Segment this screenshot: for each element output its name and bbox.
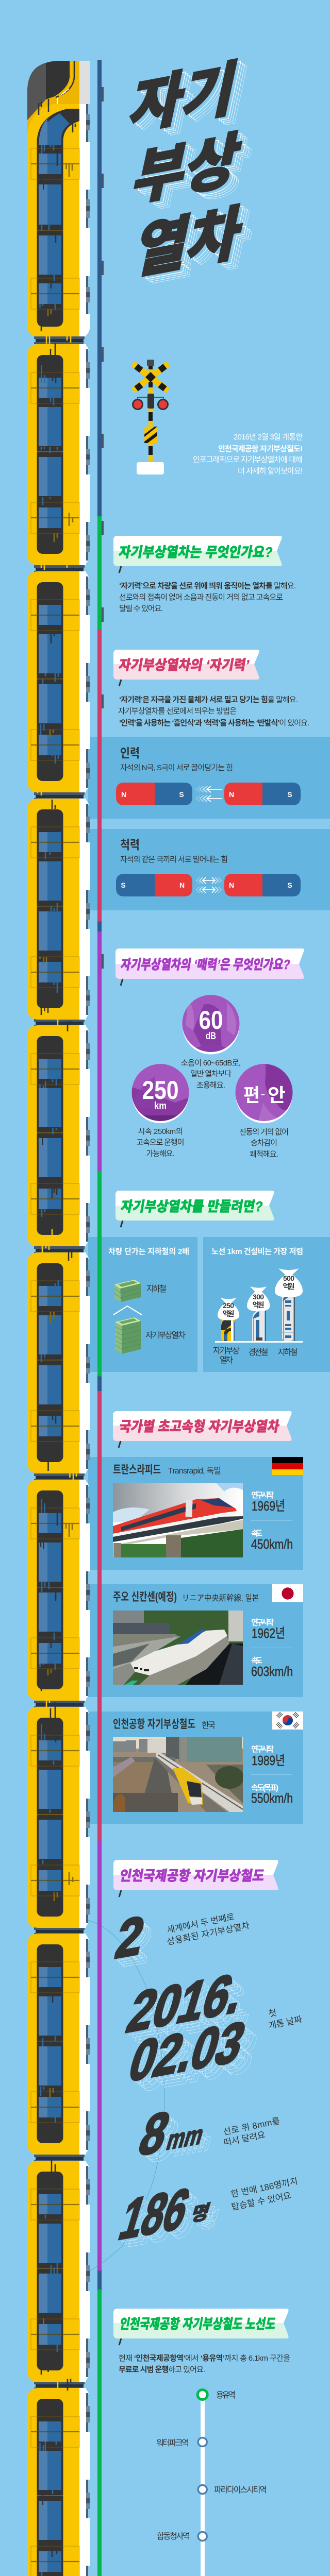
title: 열차 xyxy=(133,201,252,289)
money bag: 300 xyxy=(247,1286,270,1311)
photo: Transrapid train xyxy=(113,1483,243,1557)
stat: opening date: 2016. xyxy=(124,1963,255,2048)
station: Paradise City: 파라다이스시티역 xyxy=(214,2485,267,2495)
stats: 연구시작 xyxy=(251,1745,274,1754)
icon: maglev train xyxy=(221,1319,235,1341)
train connectors xyxy=(34,336,85,2389)
stats: 연구시작 xyxy=(251,1618,274,1627)
circle: 250 km: 250 xyxy=(142,1076,178,1105)
chart baseline xyxy=(215,1341,303,1343)
text: magnetic force: ‘자기력’은 자극을 가진 물체가 서로 밀고 당기는 힘을 말해요. xyxy=(119,696,298,704)
stat: number 2: 2 xyxy=(113,1907,151,1973)
stat: opening date: 2016. xyxy=(121,1960,252,2045)
heading: what is maglev: 자기부상열차는 무엇인가요? xyxy=(118,544,274,560)
text: second in the world: 세계에서 두 번째로 xyxy=(166,1912,235,1935)
route map xyxy=(142,2389,267,2576)
title: 부상 xyxy=(131,128,250,215)
station: Government Complex: 합동청사역 xyxy=(157,2532,190,2541)
chart labels: 지하철 xyxy=(277,1348,298,1357)
circle: 60 dB: dB xyxy=(206,1031,216,1042)
heading: attractions of maglev xyxy=(116,948,304,986)
flag: Korea xyxy=(272,1711,303,1730)
chart labels: 자기부상 xyxy=(213,1346,240,1355)
stats: 1969년 xyxy=(252,1498,285,1514)
text: what is maglev: ‘자기력’으로 차량을 선로 위에 띄워 움직이는 열차를 말해요. xyxy=(119,582,296,590)
text: what is maglev: 선로와의 접촉이 없어 소음과 진동이 거의 없고 고속으로 xyxy=(119,593,283,602)
text: route description xyxy=(119,2354,290,2374)
station: Water Park xyxy=(156,2438,207,2448)
magnet: right: S xyxy=(287,881,292,889)
stat: 186 people: 명 xyxy=(188,2201,212,2226)
text: what is maglev: 달릴 수 있어요. xyxy=(119,604,163,613)
heading: route map xyxy=(113,2309,289,2345)
text: first opening date: 개통 날짜 xyxy=(268,2014,303,2031)
circle: 60 dB xyxy=(183,995,239,1056)
arrows: repulsion xyxy=(196,877,221,893)
title: 부상 xyxy=(137,132,256,220)
panel: vehicle cost xyxy=(108,1247,189,1354)
card subtitle: Transrapid, 독일 xyxy=(168,1466,221,1476)
stat: 186 people: 186 xyxy=(113,2177,196,2252)
text: route description: 현재 ‘인천국제공항역’에서 ‘용유역’까지 총 6.1km 구간을 xyxy=(119,2354,290,2363)
card title: 트란스라피드 xyxy=(113,1463,161,1476)
magnet: right xyxy=(224,783,301,805)
photo: Incheon train xyxy=(113,1737,243,1812)
intro text: 인천국제공항 자기부상철도! xyxy=(218,445,303,453)
icon: money stack small xyxy=(114,1280,141,1302)
stat: opening date: 02.03 xyxy=(122,2009,252,2094)
stat: opening date: 02.03 xyxy=(128,2015,258,2099)
circle: comfort: 편 xyxy=(243,1084,260,1106)
panel: attraction xyxy=(116,747,301,805)
title: 자기 xyxy=(124,54,243,142)
caption: repulsion: 자석의 같은 극끼리 서로 밀어내는 힘 xyxy=(120,855,228,864)
heading: cost: 자기부상열차를 만들려면? xyxy=(120,1198,264,1214)
caption: 250 km: 고속으로 운행이 xyxy=(136,1138,185,1147)
text: magnetic force: ‘인력’을 사용하는 ‘흡인식’과 ‘척력’을 사용하는 ‘반발식’이 있어요. xyxy=(119,719,309,727)
station: Yongyu xyxy=(197,2389,236,2400)
text: second in the world: 상용화된 자기부상열차 xyxy=(166,1921,251,1947)
caption: 250 km: 가능해요. xyxy=(146,1149,174,1158)
caption: 60 dB: 일반 열차보다 xyxy=(190,1070,232,1078)
magnet: right xyxy=(224,874,301,896)
stat: opening date: 2016. xyxy=(130,1969,261,2053)
title: 부상 xyxy=(133,129,252,217)
icon: light rail train xyxy=(252,1310,266,1341)
caption: 250 km xyxy=(136,1127,185,1158)
card: Transrapid xyxy=(113,1457,303,1557)
caption: 250 km: 시속 250km의 xyxy=(138,1127,183,1136)
stat: number 2: 2 xyxy=(115,1909,153,1975)
chart labels: 열차 xyxy=(220,1355,233,1365)
flag: Japan xyxy=(272,1584,303,1602)
magnet: right: N xyxy=(229,881,234,889)
stats: 속도 xyxy=(251,1656,262,1665)
circle: comfort: 안 xyxy=(268,1084,286,1106)
train: front car xyxy=(27,61,90,336)
caption: 60 dB xyxy=(181,1059,241,1090)
stats: 연구시작 xyxy=(251,1491,274,1500)
text: what is maglev xyxy=(119,582,296,613)
money bag: 300: 300 xyxy=(253,1293,264,1301)
heading: fastest maglev by country: 국가별 초고속형 자기부상열차 xyxy=(118,1418,280,1434)
circle: 250 km: km xyxy=(154,1100,167,1112)
magnet: right: S xyxy=(287,790,292,799)
card: Chuo Shinkansen xyxy=(113,1584,303,1685)
title: 열차 xyxy=(139,206,258,293)
text: 186 passengers: 한 번에 186명까지 xyxy=(230,2176,299,2199)
caption: 60 dB: 조용해요. xyxy=(196,1081,225,1090)
magnet: left xyxy=(116,783,192,805)
stats: 550km/h xyxy=(251,1790,293,1806)
title: 열차 xyxy=(137,204,256,292)
intro text: 인포그래픽으로 자기부상열차에 대해 xyxy=(193,455,303,464)
magnet: left: N xyxy=(121,790,126,799)
chart labels: 경전철 xyxy=(249,1348,268,1357)
chart labels xyxy=(213,1346,298,1365)
label: maglev: 자기부상열차 xyxy=(145,1331,186,1340)
panel: construction cost xyxy=(211,1247,303,1365)
money bag: 500: 억원 xyxy=(283,1282,295,1291)
stat: 8 mm: 8 xyxy=(133,2099,176,2168)
stats: 속도 xyxy=(251,1529,262,1538)
stat: 8 mm: 8 xyxy=(136,2102,179,2171)
circle: comfort xyxy=(235,1064,294,1123)
stat: 8 mm: mm xyxy=(168,2122,212,2160)
heading: magnetic force xyxy=(113,650,259,686)
heading: Incheon airport maglev xyxy=(113,1860,278,1897)
stat: 186 people: 186 xyxy=(119,2182,203,2257)
caption: attraction: 자석의 N극, S극이 서로 끌어당기는 힘 xyxy=(120,764,233,772)
text: first opening date: 첫 xyxy=(268,2008,277,2019)
stat: 186 people: 186 xyxy=(122,2184,206,2260)
heading: attractions of maglev: 자기부상열차의 ‘매력’은 무엇인가요? xyxy=(120,957,291,972)
caption: 60 dB: 소음이 60~65dB로, xyxy=(181,1059,241,1067)
text: 186 passengers xyxy=(230,2176,299,2212)
circle: 250 km xyxy=(132,1064,189,1123)
title: 자기 xyxy=(132,60,251,147)
stat: opening date: 02.03 xyxy=(135,2020,265,2105)
money bag: 500 xyxy=(275,1268,303,1297)
magnet: left: S xyxy=(121,881,126,889)
panel: repulsion xyxy=(116,838,301,896)
caption: comfort: 승차감이 xyxy=(251,1139,277,1147)
text: floats 8mm: 선로 위 8mm를 xyxy=(222,2116,281,2137)
money bag: 300: 억원 xyxy=(253,1301,264,1309)
icon: money stack large xyxy=(115,1317,141,1354)
title: 자기 xyxy=(130,58,249,146)
icon: railway crossing signal xyxy=(132,360,169,474)
flag: Germany xyxy=(272,1457,303,1475)
title: 열차 xyxy=(135,202,254,290)
title: 자기 xyxy=(134,61,253,149)
stats xyxy=(251,1618,293,1679)
magnet: left xyxy=(116,874,192,896)
intro text: 더 자세히 알아보아요! xyxy=(238,467,303,476)
stat: 8 mm: mm xyxy=(163,2119,208,2156)
card: Incheon maglev xyxy=(113,1711,303,1812)
arc line behind big numbers xyxy=(88,1920,164,2270)
heading: Incheon airport maglev: 인천국제공항 자기부상철도 xyxy=(119,1868,266,1884)
heading: route map: 인천국제공항 자기부상철도 노선도 xyxy=(119,2316,277,2332)
title: 부상 xyxy=(127,125,246,213)
rail line with coloured segments xyxy=(97,60,102,2576)
heading: what is maglev xyxy=(113,536,282,573)
title: 부상 xyxy=(135,131,254,218)
card title: 인천공항 자기부상철도 xyxy=(113,1718,195,1731)
stat: 186 people: 명 xyxy=(196,2209,221,2233)
title: 열차 xyxy=(129,198,249,286)
heading: construction cost: 노선 1km 건설비는 가장 저렴 xyxy=(211,1247,303,1256)
stat: number 2: 2 xyxy=(111,1904,149,1970)
caption: comfort xyxy=(239,1128,289,1159)
stats: 1962년 xyxy=(252,1625,285,1641)
text: magnetic force xyxy=(118,696,309,727)
text: floats 8mm: 떠서 달려요 xyxy=(223,2130,266,2148)
money bag: 250 xyxy=(218,1298,239,1320)
stat: 8 mm: mm xyxy=(172,2125,216,2163)
label: subway: 지하철 xyxy=(146,1284,167,1294)
title: 자기 xyxy=(128,57,247,144)
stat: opening date: 02.03 xyxy=(131,2018,261,2102)
info panels behind the train xyxy=(27,737,330,2576)
magnet: left: S xyxy=(179,790,184,799)
photo: L0 series train xyxy=(113,1611,243,1685)
intro text: 2016년 2월 3일 개통한 xyxy=(234,433,303,442)
stat: number 2: 2 xyxy=(117,1911,155,1977)
stats xyxy=(251,1745,293,1806)
text: route description: 무료로 시범 운행하고 있어요. xyxy=(119,2365,205,2374)
stat: 186 people: 명 xyxy=(192,2206,217,2230)
heading: vehicle cost: 차량 단가는 지하철의 2배 xyxy=(108,1247,189,1256)
circle: comfort: - xyxy=(261,1089,265,1100)
train: paint drips xyxy=(38,99,76,2576)
caption: comfort: 쾌적해요. xyxy=(250,1150,278,1159)
icon: greater than chevron xyxy=(113,1306,142,1315)
stat: opening date: 2016. xyxy=(127,1966,258,2050)
heading: cost xyxy=(116,1191,274,1227)
stat: opening date: 2016. xyxy=(133,1971,265,2056)
money bag: 500: 500 xyxy=(283,1274,294,1282)
money bag: 250: 억원 xyxy=(223,1310,234,1318)
arrows: attraction xyxy=(196,786,222,802)
stat: opening date: 02.03 xyxy=(125,2012,255,2097)
text: magnetic force: 자기부상열차를 선로에서 띄우는 방법은 xyxy=(118,707,237,716)
text: floats 8mm xyxy=(222,2116,281,2148)
card title: 주오 신칸센(예정) xyxy=(113,1590,177,1603)
stat: 8 mm: 8 xyxy=(139,2105,183,2173)
text: 186 passengers: 탑승할 수 있어요 xyxy=(230,2191,292,2212)
stat: 8 mm xyxy=(133,2099,216,2176)
circle: 60 dB: 60 xyxy=(199,1006,223,1035)
train: passenger cars xyxy=(27,344,90,2576)
station: Water Park: 워터파크역 xyxy=(156,2438,189,2448)
card subtitle: リニア中央新幹線, 일본 xyxy=(182,1594,259,1603)
stats xyxy=(251,1491,293,1552)
stats: 603km/h xyxy=(251,1664,293,1679)
heading: fastest maglev by country xyxy=(113,1411,292,1448)
magnet: left: N xyxy=(179,881,185,889)
heading: attraction: 인력 xyxy=(120,747,140,760)
title xyxy=(124,54,258,293)
caption: comfort: 진동의 거의 없어 xyxy=(239,1128,289,1137)
stat: 186 people: 186 xyxy=(116,2179,200,2255)
heading: repulsion: 척력 xyxy=(120,838,140,852)
heading: magnetic force: 자기부상열차의 ‘자기력’ xyxy=(118,657,251,673)
station: Government Complex xyxy=(157,2532,207,2541)
stat: opening date xyxy=(121,1960,265,2105)
station: Yongyu: 용유역 xyxy=(216,2391,236,2400)
rail ties xyxy=(102,87,104,969)
stat: number 2: 2 xyxy=(119,1913,157,1979)
stats: 450km/h xyxy=(251,1536,293,1552)
icon: subway train xyxy=(282,1293,295,1341)
stats: 1989년 xyxy=(252,1753,285,1768)
card subtitle: 한국 xyxy=(202,1721,216,1730)
stat: 8 mm: 8 xyxy=(142,2107,186,2176)
money bag: 250: 250 xyxy=(223,1301,234,1310)
magnet: right: N xyxy=(229,790,234,799)
stats: 속도(목표) xyxy=(251,1784,278,1792)
intro text xyxy=(193,433,303,476)
